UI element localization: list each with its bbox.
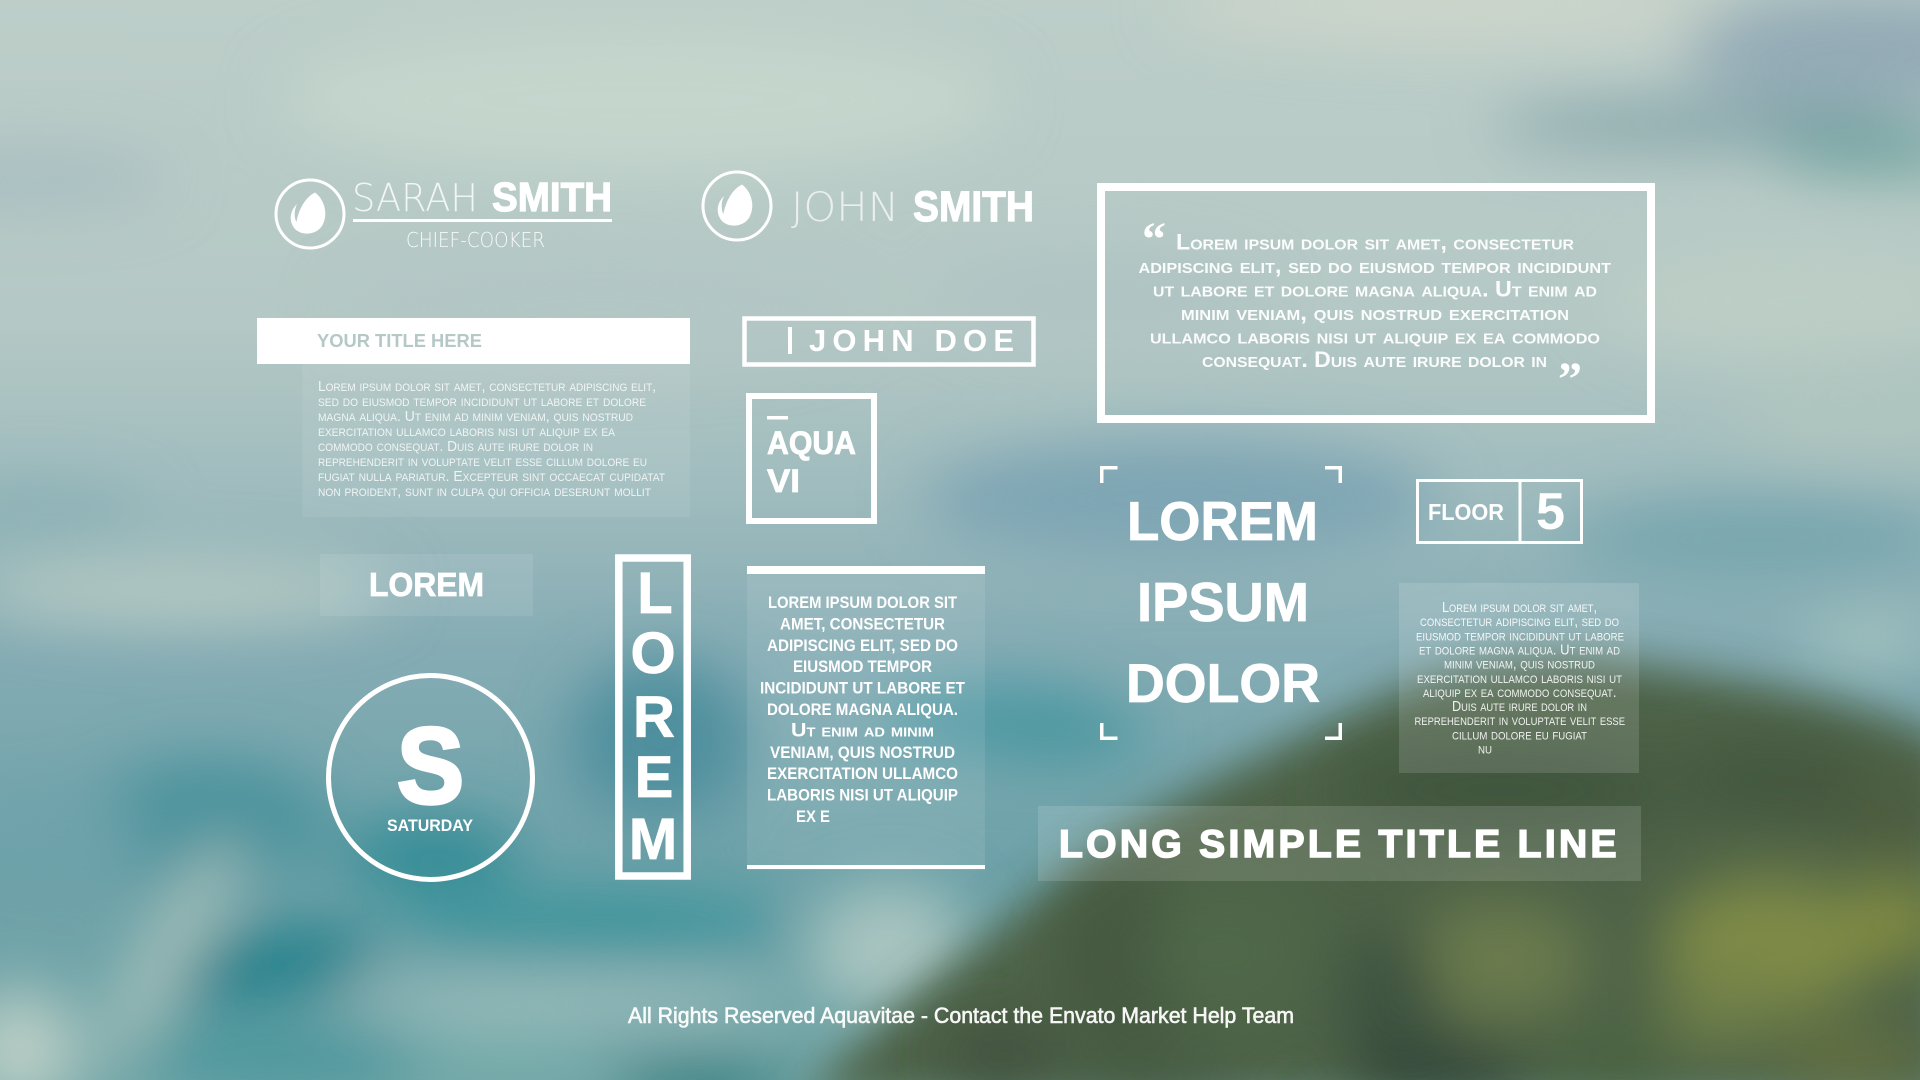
panel: centered text: Lorem ipsum dolor sit amet, (1442, 599, 1597, 616)
body panel: sed do eiusmod tempor incididunt ut labore et dolore (318, 393, 646, 410)
title text: YOUR TITLE HERE (317, 331, 482, 351)
body panel: non proident, sunt in culpa qui officia deserunt mollit (318, 483, 651, 500)
body panel: commodo consequat. Duis aute irure dolor in (318, 438, 593, 455)
framed title: Aqua Vi: VI (767, 463, 800, 499)
logo title: John Smith (703, 172, 1034, 240)
circle badge: Saturday: S (397, 705, 464, 826)
panel: centered text: minim veniam, quis nostrud (1444, 656, 1595, 673)
body panel: reprehenderit in voluptate velit esse cillum dolore eu (318, 453, 647, 470)
quote text: consequat. Duis aute irure dolor in (1202, 347, 1547, 372)
sky and upper water (280, 30, 1000, 170)
first name: SARAH (352, 176, 478, 220)
panel: centered text: cillum dolore eu fugiat (1452, 726, 1587, 743)
panel: bold text with rules: LABORIS NISI UT ALIQUIP (767, 786, 958, 805)
title band: long simple title line (1038, 806, 1641, 881)
opening quote mark: “ (1142, 213, 1166, 266)
quote text: ut labore et dolore magna aliqua. Ut enim ad (1153, 276, 1597, 302)
framed title: Aqua Vi: AQUA (767, 425, 856, 461)
panel: centered text: eiusmod tempor incididunt ut labore (1416, 627, 1624, 644)
panel: bold text with rules: AMET, CONSECTETUR (780, 614, 945, 633)
vertical framed title: Lorem: M (629, 807, 677, 872)
panel: your title here (257, 318, 690, 517)
framed title: John Doe (744, 318, 1034, 364)
closing quote mark: ” (1558, 353, 1582, 406)
panel: bold text with rules: LOREM IPSUM DOLOR SIT (768, 593, 958, 612)
bracketed title: Lorem Ipsum Dolor: IPSUM (1137, 571, 1309, 633)
vertical framed title: Lorem: E (635, 745, 673, 810)
green hill (800, 658, 1920, 1080)
panel: bold text with rules: INCIDIDUNT UT LABORE ET (760, 679, 966, 698)
surname: SMITH (913, 183, 1034, 231)
surname: SMITH (492, 174, 612, 220)
body panel: magna aliqua. Ut enim ad minim veniam, quis nostrud (318, 408, 633, 425)
bracketed title: Lorem Ipsum Dolor: LOREM (1127, 490, 1318, 552)
underline (353, 219, 612, 222)
quote text: ullamco laboris nisi ut aliquip ex ea commodo (1150, 324, 1600, 348)
badge: floor 5: FLOOR (1428, 499, 1504, 525)
title bar (257, 318, 690, 364)
panel: bold text with rules: EIUSMOD TEMPOR (793, 657, 932, 676)
framed title: Aqua Vi (749, 396, 874, 521)
body panel (302, 364, 690, 517)
panel: centered text: reprehenderit in voluptate velit esse (1414, 712, 1625, 729)
light diagonal ridge (84, 825, 256, 1075)
panel: bold text with rules (747, 566, 985, 870)
quote text: minim veniam, quis nostrud exercitation (1181, 300, 1569, 325)
body panel: fugiat nulla pariatur. Excepteur sint occaecat cupidatat (318, 468, 665, 485)
footer credit: All Rights Reserved Aquavitae - Contact the Envato Market Help Team (628, 1003, 1294, 1028)
panel: centered text: consectetur adipiscing elit, sed do (1420, 613, 1619, 630)
title band: Lorem: LOREM (369, 566, 484, 603)
teal water (90, 760, 330, 880)
first name: JOHN (791, 185, 899, 231)
panel: centered text (1399, 583, 1639, 773)
icon: egg logo (276, 180, 344, 248)
bracketed title: Lorem Ipsum Dolor: DOLOR (1126, 652, 1320, 714)
panel: bold text with rules: ADIPISCING ELIT, SED DO (767, 636, 958, 655)
bracketed title: Lorem Ipsum Dolor (1102, 468, 1340, 738)
badge: floor 5 (1418, 480, 1582, 543)
panel: centered text: exercitation ullamco laboris nisi ut (1417, 670, 1622, 687)
panel: bold text with rules: Ut enim ad minim (791, 720, 934, 741)
icon: egg logo (703, 172, 771, 240)
panel: quote (1101, 187, 1651, 419)
quote text (1138, 230, 1611, 372)
panel: bold text with rules: EX E (796, 807, 830, 826)
circle badge: Saturday (328, 676, 532, 880)
body panel: exercitation ullamco laboris nisi ut aliquip ex ea (318, 423, 616, 440)
vertical framed title: Lorem: R (633, 685, 675, 750)
body panel: Lorem ipsum dolor sit amet, consectetur adipiscing elit, (318, 378, 656, 395)
circle badge: Saturday: SATURDAY (387, 816, 474, 835)
title band: Lorem (320, 554, 533, 616)
panel: centered text: et dolore magna aliqua. Ut enim ad (1419, 642, 1620, 658)
title band: long simple title line: LONG SIMPLE TITLE LINE (1059, 823, 1616, 866)
logo title: Sarah Smith (276, 174, 612, 252)
panel: centered text: aliquip ex ea commodo consequat. (1423, 684, 1616, 701)
framed title: John Doe: JOHN DOE (809, 323, 1014, 358)
quote text: Lorem ipsum dolor sit amet, consectetur (1176, 230, 1574, 254)
panel: centered text: nu (1478, 740, 1492, 758)
quote text: adipiscing elit, sed do eiusmod tempor incididunt (1138, 253, 1611, 278)
panel: bold text with rules: EXERCITATION ULLAMCO (767, 764, 958, 783)
panel: bold text with rules: DOLORE MAGNA ALIQUA. (767, 700, 958, 719)
corner brackets (1102, 468, 1340, 738)
panel: centered text: Duis aute irure dolor in (1452, 698, 1587, 715)
role: CHIEF-COOKER (406, 228, 545, 252)
vertical framed title: Lorem (619, 558, 687, 876)
badge: floor 5: 5 (1536, 483, 1565, 541)
vertical framed title: Lorem: O (630, 621, 676, 686)
panel: bold text with rules: VENIAM, QUIS NOSTRUD (770, 743, 955, 762)
vertical framed title: Lorem: L (637, 561, 673, 626)
